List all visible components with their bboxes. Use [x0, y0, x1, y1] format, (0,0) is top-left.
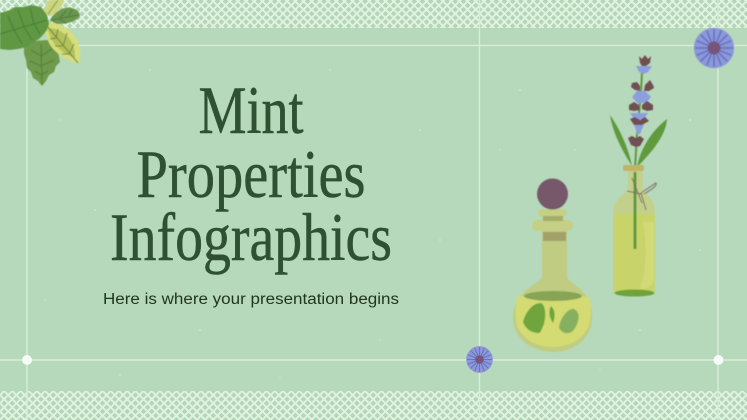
- leaf: large left: [0, 5, 49, 50]
- icon: tall bottle: [613, 165, 656, 296]
- leaf: dark lower: [24, 40, 60, 86]
- icon: cornflower bottom: [466, 346, 493, 373]
- lattice band: top: [0, 0, 747, 28]
- twine bow: [627, 178, 656, 210]
- leaf: small upper: [50, 8, 80, 24]
- icon: round stopper bottle: [513, 178, 592, 352]
- leaf: top yellow: [45, 0, 64, 16]
- lattice band: bottom: [0, 391, 747, 420]
- node dots: [22, 355, 724, 365]
- title: Infographics: [110, 199, 392, 275]
- icon: cornflower top right: [694, 28, 734, 68]
- leaf: yellow variegated: [44, 23, 80, 64]
- paper speckles: [44, 69, 701, 379]
- title: Properties: [136, 136, 366, 212]
- icon: mint leaves: [0, 0, 80, 86]
- icon: lavender sprig: [610, 55, 667, 168]
- title: Mint: [198, 72, 304, 148]
- title: [110, 72, 392, 275]
- subtitle: Here is where your presentation begins: [103, 291, 399, 308]
